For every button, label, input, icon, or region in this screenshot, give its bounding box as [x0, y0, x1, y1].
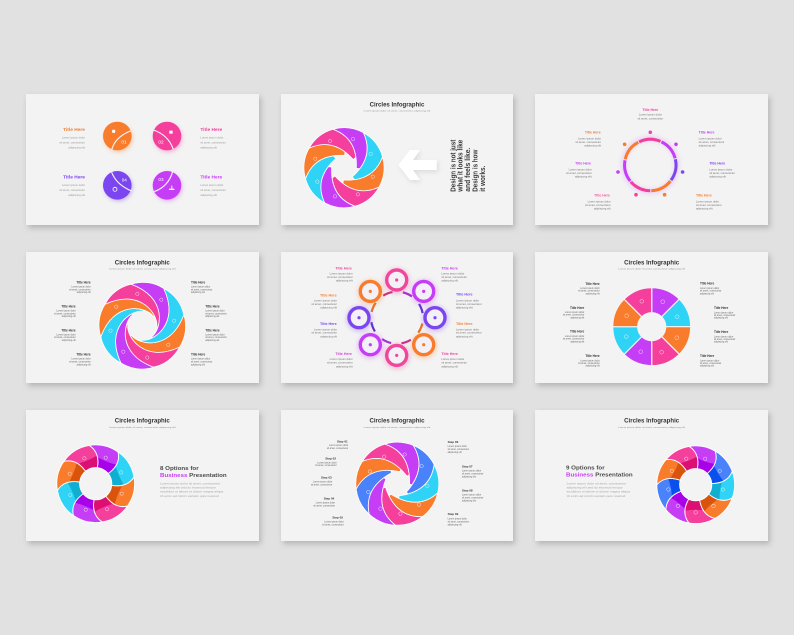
text: step 09: adipiscing elit [448, 523, 462, 526]
text: right 2: Title Here [456, 293, 473, 297]
text: upper right: adipiscing elit [699, 144, 716, 148]
text: orange title [59, 127, 85, 150]
text: top [637, 108, 663, 121]
text: upper right: Title Here [699, 131, 715, 135]
heading: circles infographic [109, 261, 176, 271]
text: right 1: Lorem ipsum dolor [441, 271, 464, 275]
text: left 3: Title Here [320, 322, 337, 326]
text: right 2: Lorem ipsum dolor [205, 310, 225, 313]
heading: circles infographic: Circles Infographic [115, 419, 170, 425]
text: middle right [709, 161, 735, 179]
text: right 3 [714, 330, 736, 344]
text: step 05: Lorem ipsum dolor [324, 520, 344, 523]
text: nine options heading: 9 Options for [566, 465, 605, 471]
text: middle right: adipiscing elit [709, 175, 726, 179]
text: left 4: Lorem ipsum dolor [330, 357, 353, 361]
chart: connecting arcs [361, 282, 433, 354]
chart: eight segment ring [605, 280, 699, 374]
heading: circles infographic [364, 419, 431, 429]
text: left 3: Lorem ipsum dolor [565, 335, 585, 338]
chart: segmented ring with dots [614, 129, 686, 201]
panel: nine step swirl [281, 410, 513, 541]
text: left 3: Title Here [61, 328, 76, 332]
text: right 3: Title Here [714, 330, 729, 334]
text: left 3 [311, 322, 337, 338]
text: right 2: adipiscing elit [205, 315, 220, 318]
text: right 4: adipiscing elit [191, 363, 205, 366]
heading: circles infographic: Lorem ipsum dolor sit amet, consectetur adipiscing elit [109, 426, 176, 429]
text: left 4 [327, 352, 353, 368]
text: left 2: Lorem ipsum dolor [565, 311, 585, 314]
text: right 1 [191, 280, 213, 294]
text: step 04: Step 04 [324, 496, 335, 500]
text: eight options heading: adipiscing elit and do eiusmod tempor [160, 486, 216, 489]
text: step 07: Step 07 [462, 464, 473, 468]
text: left 3 [563, 330, 585, 344]
text blocks: eight titles [311, 266, 482, 368]
text: right 2: Lorem ipsum dolor [714, 311, 733, 314]
text: eight options heading: Ut enim ad minim veniam quis nostrud [160, 495, 219, 498]
text: step 06: Lorem ipsum dolor [448, 445, 467, 448]
text: right 2: sit amet, consectetur [714, 314, 736, 317]
circle chart: four divided circles [103, 122, 182, 201]
text: left 4: adipiscing elit [586, 365, 600, 368]
text blocks: nine steps [311, 439, 484, 526]
text: step 08: Lorem ipsum dolor [462, 494, 481, 497]
text: left 2: adipiscing elit [570, 317, 585, 320]
text: upper right: sit amet, consectetur [699, 140, 724, 144]
text: left 3: sit amet, consectetur [563, 338, 585, 341]
text: right 1: Title Here [191, 280, 206, 284]
text: middle right: sit amet, consectetur [709, 171, 735, 175]
text: middle left: Lorem ipsum dolor [569, 167, 592, 171]
text: left 1: Lorem ipsum dolor [580, 287, 600, 290]
text: right 1: Title Here [700, 282, 715, 286]
panel: swirl with arrow [281, 94, 513, 225]
text: right 2: sit amet, consectetur [205, 312, 227, 315]
text: step 03 [311, 475, 333, 487]
text: left 1: Lorem ipsum dolor [71, 286, 91, 289]
text: upper left: adipiscing elit [584, 144, 601, 148]
chart: eight petal swirl [299, 123, 389, 212]
chart: nine two-tone segments [652, 442, 738, 528]
text: nine options heading: Lorem ipsum dolor sit amet, consectetur [567, 483, 626, 486]
text: eight options heading: 8 Options for [160, 466, 199, 472]
text: left 4: adipiscing elit [77, 363, 91, 366]
text: left 2: Title Here [61, 305, 76, 309]
text: step 04 [314, 496, 335, 507]
text: right 4 [441, 352, 467, 368]
text: left 4: sit amet, consectetur [69, 360, 91, 363]
text: right 3: adipiscing elit [456, 334, 473, 338]
text: step 09: Lorem ipsum dolor [448, 517, 467, 520]
text: left 1: adipiscing elit [336, 279, 353, 283]
text: right 1: Lorem ipsum dolor [191, 286, 210, 289]
text: step 07 [462, 464, 484, 478]
text: step 04: sit amet, consectetur [314, 504, 335, 507]
text: left 3: Lorem ipsum dolor [314, 327, 337, 331]
text: indigo title: Lorem ipsum dolor [62, 183, 85, 187]
text: lower right: Title Here [696, 193, 712, 197]
text: step 05: Step 05 [332, 515, 343, 519]
text: rotated quote: what it looks like [458, 140, 465, 193]
text: left 2: Lorem ipsum dolor [314, 299, 337, 303]
text: step 04: Lorem ipsum dolor [316, 501, 335, 504]
text: right 4: Title Here [191, 353, 206, 357]
text: right 2: Lorem ipsum dolor [456, 298, 479, 302]
text: orange title: Lorem ipsum dolor [62, 136, 85, 140]
text: rotated quote [450, 139, 487, 193]
text: left 1: adipiscing elit [586, 292, 600, 295]
text: right 4: Title Here [441, 352, 458, 356]
text: right 4 [191, 353, 213, 366]
text: lower left: sit amet, consectetur [585, 203, 611, 207]
chart: eight two-tone segments [52, 440, 139, 527]
text: middle right: Title Here [709, 161, 725, 165]
text: left 1: adipiscing elit [77, 291, 91, 294]
text: upper right: Lorem ipsum dolor [699, 136, 722, 140]
text: right 3 [205, 328, 227, 342]
text: left 4: Title Here [335, 352, 352, 356]
text: eight options heading: Lorem ipsum dolor sit amet, consectetur [160, 483, 220, 486]
panel: eight options [26, 410, 259, 541]
text: rotated quote: it works. [480, 166, 487, 192]
text: eight options heading: Business Presentation [160, 473, 227, 479]
circle chart: four divided circles: 02 [158, 140, 164, 145]
text: right 1: adipiscing elit [441, 279, 458, 283]
text: right 4: Lorem ipsum dolor [191, 358, 210, 361]
heading: circles infographic [109, 419, 176, 429]
text: step 05: sit amet, consectetur [322, 523, 344, 526]
heading: circles infographic: Circles Infographic [115, 261, 170, 267]
text: right 3: adipiscing elit [205, 339, 220, 342]
text: left 1: Title Here [76, 281, 91, 285]
text: middle left: adipiscing elit [575, 175, 592, 179]
text: indigo title: sit amet, consectetur [59, 188, 85, 192]
text: left 4: Title Here [76, 353, 91, 357]
text: step 03: Step 03 [321, 475, 332, 479]
text: right 2: Title Here [714, 306, 729, 310]
heading: circles infographic: Circles Infographic [624, 261, 680, 267]
text: right 3: Lorem ipsum dolor [205, 333, 225, 336]
chart: eight ring circles [348, 270, 446, 367]
text: right 3: sit amet, consectetur [205, 336, 227, 339]
text: step 05 [322, 515, 344, 526]
text: right 2: adipiscing elit [714, 317, 728, 320]
text: right 1: Lorem ipsum dolor [700, 287, 719, 290]
heading: circles infographic: Circles Infographic [624, 419, 680, 425]
text: left 2: sit amet, consectetur [311, 302, 337, 306]
arrow: white pointing left [398, 150, 437, 180]
text: left 2: sit amet, consectetur [563, 314, 585, 317]
panel: pie ring [535, 252, 768, 383]
text: orange title: adipiscing elit [68, 146, 85, 150]
panel: seven dot ring [535, 94, 768, 225]
text: right 2: Title Here [205, 305, 220, 309]
text: left 1: sit amet, consectetur [327, 275, 353, 279]
text: eight options heading: incididunt ut labore et dolore magna aliqua [160, 491, 224, 494]
text: step 01 [327, 439, 349, 450]
text: step 03: sit amet, consectetur [311, 484, 333, 487]
text: step 07: adipiscing elit [462, 475, 476, 478]
text: right 4: sit amet, consectetur [441, 361, 467, 365]
text: step 01: Lorem ipsum dolor [329, 444, 349, 447]
text: right 2 [205, 305, 227, 318]
text: step 08: Step 08 [462, 488, 473, 492]
text: left 4: Lorem ipsum dolor [71, 358, 91, 361]
text blocks: seven titles [566, 108, 735, 210]
text: middle left: Title Here [575, 161, 591, 165]
text: left 2: Lorem ipsum dolor [56, 310, 76, 313]
text: right 2 [714, 306, 736, 320]
text: step 09: Step 09 [448, 512, 459, 516]
text: step 09 [448, 512, 469, 526]
text: top: Title Here [642, 108, 658, 112]
text: right 3: sit amet, consectetur [714, 338, 736, 341]
text: upper left [575, 131, 601, 148]
text: left 1: Title Here [335, 266, 352, 270]
text: right 1: adipiscing elit [700, 292, 714, 295]
text: step 08: adipiscing elit [462, 499, 476, 502]
text: left 3: sit amet, consectetur [54, 336, 76, 339]
text: orange title: sit amet, consectetur [59, 141, 85, 145]
text: purple title: adipiscing elit [200, 193, 217, 197]
text: step 03: Lorem ipsum dolor [313, 481, 333, 484]
text: right 4: Title Here [700, 354, 715, 358]
text: step 07: Lorem ipsum dolor [462, 469, 481, 472]
text blocks: four titles [59, 127, 226, 197]
text: right 4 [700, 354, 722, 368]
text: step 06: Step 06 [448, 440, 459, 444]
circle chart: four divided circles: 04 [122, 178, 127, 183]
text: left 1 [578, 282, 600, 295]
text: orange title: Title Here [63, 127, 85, 133]
text: step 06: adipiscing elit [448, 451, 462, 454]
text: left 2 [311, 293, 337, 310]
text: right 3: Title Here [456, 322, 473, 326]
text: right 4: Lorem ipsum dolor [441, 357, 464, 361]
text: step 07: sit amet, consectetur [462, 472, 484, 475]
chart: nine petal swirl [350, 438, 442, 530]
text: right 3: Lorem ipsum dolor [714, 335, 733, 338]
text: step 09: sit amet, consectetur [448, 520, 469, 523]
text: left 1: Lorem ipsum dolor [330, 271, 353, 275]
text: lower left: Title Here [594, 193, 610, 197]
text: middle right: Lorem ipsum dolor [709, 167, 732, 171]
text: step 08 [462, 488, 484, 502]
text: nine options heading: Ut enim ad minim veniam quis nostrud [567, 495, 626, 498]
heading: circles infographic: Circles Infographic [370, 102, 425, 108]
text: left 1: sit amet, consectetur [578, 290, 600, 293]
text: eight options heading [160, 466, 227, 498]
panel: ring of eight circles [281, 252, 513, 383]
text: purple title [200, 174, 226, 197]
text: right 1: adipiscing elit [191, 291, 205, 294]
text: upper left: Title Here [585, 131, 601, 135]
text: left 1 [327, 266, 353, 283]
text: right 1: sit amet, consectetur [191, 288, 213, 291]
text: right 4: sit amet, consectetur [191, 360, 213, 363]
circle chart: four divided circles: 03 [158, 177, 164, 182]
text blocks: eight titles [54, 280, 227, 366]
text: left 1 [69, 281, 91, 294]
text: indigo title [59, 174, 85, 197]
text: right 3: sit amet, consectetur [456, 331, 482, 335]
circle chart: four divided circles: 01 [121, 140, 127, 145]
text: right 3 [456, 322, 482, 338]
text: purple title: Lorem ipsum dolor [200, 183, 223, 187]
text: upper left: Lorem ipsum dolor [578, 136, 601, 140]
text: left 3: adipiscing elit [570, 341, 585, 344]
text: nine options heading: Business Presentation [566, 472, 633, 478]
text: top: Lorem ipsum dolor [639, 113, 662, 117]
text: step 06: sit amet, consectetur [448, 448, 469, 451]
panel: four circles [26, 94, 259, 225]
heading: circles infographic: Lorem ipsum dolor sit amet, consectetur adipiscing elit [364, 426, 431, 429]
text: step 01: Step 01 [337, 439, 348, 443]
text: left 3: adipiscing elit [320, 334, 337, 338]
text: rotated quote: Design is not just [450, 139, 457, 192]
text: left 4: Title Here [585, 354, 600, 358]
text blocks: eight titles [563, 282, 736, 368]
chart: curved eight petal swirl [93, 276, 192, 375]
text: step 02: sit amet, consectetur [315, 464, 337, 467]
text: left 4 [578, 354, 600, 368]
text: pink title [200, 127, 226, 150]
text: right 4: adipiscing elit [441, 364, 458, 368]
text: left 3: sit amet, consectetur [311, 331, 337, 335]
text: step 02: Lorem ipsum dolor [317, 461, 337, 464]
text: upper left: sit amet, consectetur [575, 140, 601, 144]
text: left 3: Title Here [570, 330, 585, 334]
heading: circles infographic [618, 419, 686, 429]
text: right 1: sit amet, consectetur [700, 290, 722, 293]
text: indigo title: Title Here [63, 174, 85, 180]
text: middle left: sit amet, consectetur [566, 171, 592, 175]
text: left 2: adipiscing elit [62, 315, 76, 318]
text: right 2: sit amet, consectetur [456, 302, 482, 306]
heading: circles infographic: Lorem ipsum dolor sit amet, consectetur adipiscing elit [618, 426, 686, 429]
text: right 2: adipiscing elit [456, 306, 473, 310]
text: left 4 [69, 353, 91, 366]
text: left 2: Title Here [570, 306, 585, 310]
text: nine options heading [566, 465, 633, 498]
text: right 1: Title Here [441, 266, 458, 270]
panel: curved swirl [26, 252, 259, 383]
text: right 3: Lorem ipsum dolor [456, 327, 479, 331]
text: right 3: Title Here [205, 328, 220, 332]
text: left 4: sit amet, consectetur [578, 362, 600, 365]
text: lower left: Lorem ipsum dolor [588, 199, 611, 203]
text: step 02: Step 02 [325, 456, 336, 460]
text: step 02 [315, 456, 337, 467]
heading: circles infographic: Lorem ipsum dolor sit amet, consectetur adipiscing elit [109, 268, 176, 271]
text: right 1: sit amet, consectetur [441, 275, 467, 279]
text: right 2 [456, 293, 482, 310]
text: pink title: Lorem ipsum dolor [200, 136, 223, 140]
text: lower left [585, 193, 611, 210]
text: left 2: adipiscing elit [320, 306, 337, 310]
text: pink title: Title Here [200, 127, 223, 133]
text: rotated quote: and feels like. [465, 148, 472, 192]
text: right 1 [700, 282, 722, 295]
text: purple title: sit amet, consectetur [200, 188, 226, 192]
text: right 4: adipiscing elit [700, 365, 714, 368]
text: left 2: sit amet, consectetur [54, 312, 76, 315]
text: right 1 [441, 266, 467, 283]
text: lower right: Lorem ipsum dolor [696, 199, 719, 203]
text: top: sit amet, consectetur [637, 117, 663, 121]
text: left 4: adipiscing elit [336, 364, 353, 368]
panel: nine options [535, 410, 768, 541]
text: right 4: Lorem ipsum dolor [700, 359, 719, 362]
text: nine options heading: adipiscing elit and do eiusmod tempor [567, 486, 623, 489]
text: step 06 [448, 440, 469, 454]
text: lower left: adipiscing elit [594, 206, 611, 210]
text: purple title: Title Here [200, 174, 223, 180]
text: middle left [566, 161, 592, 179]
text: left 1: Title Here [585, 282, 600, 286]
text: lower right: sit amet, consectetur [696, 203, 722, 207]
text: left 2 [54, 305, 76, 318]
heading: circles infographic [364, 102, 431, 113]
heading: circles infographic [618, 261, 686, 271]
heading: circles infographic: Lorem ipsum dolor sit amet, consectetur adipiscing elit [618, 268, 686, 271]
text: left 2: Title Here [320, 293, 337, 297]
text: left 4: sit amet, consectetur [327, 361, 353, 365]
text: right 3: adipiscing elit [714, 341, 728, 344]
text: right 4: sit amet, consectetur [700, 362, 722, 365]
text: rotated quote: Design is how [472, 149, 479, 192]
text: lower right: adipiscing elit [696, 206, 713, 210]
text: nine options heading: incididunt ut labore et dolore magna aliqua [567, 491, 631, 494]
heading: circles infographic: Circles Infographic [369, 419, 425, 425]
text: left 3: Lorem ipsum dolor [56, 333, 76, 336]
text: left 1: sit amet, consectetur [69, 288, 91, 291]
text: upper right [699, 131, 724, 148]
text: left 3: adipiscing elit [62, 339, 76, 342]
text: pink title: sit amet, consectetur [200, 141, 226, 145]
text: left 3 [54, 328, 76, 342]
text: step 01: sit amet, consectetur [327, 447, 349, 450]
text: step 08: sit amet, consectetur [462, 496, 484, 499]
text: lower right [696, 193, 722, 210]
heading: circles infographic: Lorem ipsum dolor sit amet, consectetur adipiscing elit [364, 110, 431, 113]
text: left 4: Lorem ipsum dolor [580, 359, 600, 362]
text: indigo title: adipiscing elit [68, 193, 85, 197]
text: left 2 [563, 306, 585, 320]
text: pink title: adipiscing elit [200, 146, 217, 150]
